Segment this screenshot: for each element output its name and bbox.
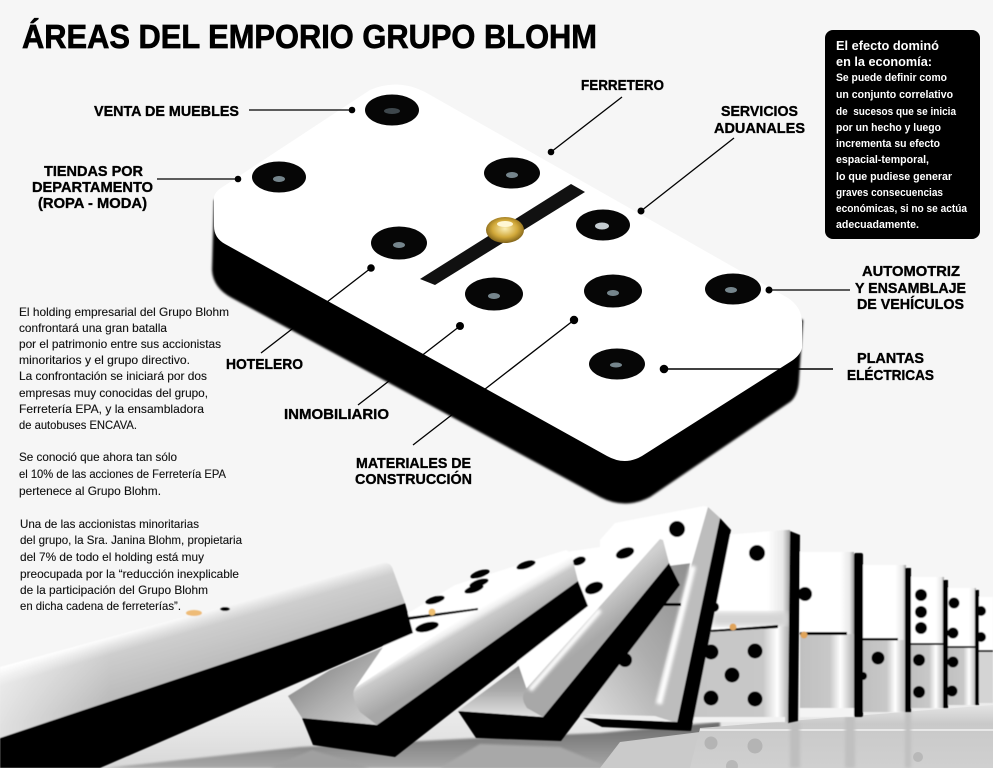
body text: por el patrimonio entre sus accionistas bbox=[19, 337, 221, 351]
body text: Se conoció que ahora tan sólo bbox=[19, 450, 177, 464]
label: automotriz: AUTOMOTRIZ bbox=[862, 263, 960, 280]
domino 6 bbox=[798, 552, 863, 717]
label: plantas electricas: ELÉCTRICAS bbox=[847, 367, 934, 384]
right white margin bbox=[993, 0, 998, 768]
domino white face bbox=[214, 84, 802, 461]
label: tiendas por departamento bbox=[32, 163, 241, 212]
label: plantas electricas bbox=[660, 350, 934, 384]
label: servicios aduanales bbox=[638, 103, 805, 214]
body text: confrontará una gran batalla bbox=[19, 321, 167, 335]
label: hotelero: HOTELERO bbox=[226, 356, 303, 373]
label: automotriz: DE VEHÍCULOS bbox=[857, 296, 964, 313]
body text: minoritarios y el grupo directivo. bbox=[19, 353, 190, 367]
callout text: económicas, si no se actúa bbox=[836, 203, 968, 215]
body text: del grupo, la Sra. Janina Blohm, propietaria bbox=[20, 533, 242, 547]
label: materiales de construccion: CONSTRUCCIÓN bbox=[355, 470, 472, 488]
body text: el 10% de las acciones de Ferretería EPA bbox=[19, 467, 226, 481]
callout: el efecto domino bbox=[825, 30, 980, 239]
domino 5 bbox=[693, 530, 800, 723]
label: ferretero: FERRETERO bbox=[581, 77, 664, 94]
domino 10 bbox=[975, 590, 993, 705]
title: ÁREAS DEL EMPORIO GRUPO BLOHM bbox=[22, 18, 597, 55]
label: venta de muebles bbox=[94, 103, 355, 120]
body text: en dicha cadena de ferreterías”. bbox=[20, 599, 181, 613]
body text: pertenece al Grupo Blohm. bbox=[19, 484, 161, 498]
label: tiendas por departamento: TIENDAS POR bbox=[44, 163, 143, 180]
label: automotriz: Y ENSAMBLAJE bbox=[855, 280, 966, 297]
body text: empresas muy conocidas del grupo, bbox=[19, 386, 208, 400]
body text: Ferretería EPA, y la ensambladora bbox=[19, 402, 204, 416]
callout text: incrementa su efecto bbox=[836, 138, 940, 150]
callout text: adecuadamente. bbox=[836, 219, 919, 231]
label: inmobiliario: INMOBILIARIO bbox=[284, 406, 389, 423]
label: automotriz bbox=[766, 263, 966, 313]
floor with reflections bbox=[0, 670, 998, 768]
body text bbox=[19, 305, 242, 613]
label: tiendas por departamento: DEPARTAMENTO bbox=[32, 179, 153, 196]
centre bar bbox=[420, 184, 585, 285]
label: inmobiliario bbox=[284, 322, 464, 423]
domino 1 bbox=[0, 563, 413, 768]
domino 9 bbox=[946, 588, 979, 705]
gold stud bbox=[486, 217, 524, 243]
label: plantas electricas: PLANTAS bbox=[857, 350, 924, 367]
domino black base bbox=[212, 150, 803, 504]
body text: El holding empresarial del Grupo Blohm bbox=[19, 305, 229, 319]
label: servicios aduanales: ADUANALES bbox=[714, 120, 805, 137]
callout text: Se puede definir como bbox=[836, 72, 947, 84]
callout heading: El efecto dominó bbox=[836, 38, 939, 53]
domino 8 bbox=[911, 577, 948, 708]
label: materiales de construccion: MATERIALES DE bbox=[356, 455, 471, 472]
callout heading bbox=[836, 38, 939, 69]
domino 2 bbox=[288, 550, 588, 757]
domino 4 bbox=[580, 506, 731, 731]
domino 3 bbox=[458, 538, 680, 741]
callout text bbox=[836, 72, 968, 231]
pips bbox=[252, 94, 761, 380]
central domino tile bbox=[212, 84, 803, 503]
body text: La confrontación se iniciará por dos bbox=[19, 369, 207, 383]
label: servicios aduanales: SERVICIOS bbox=[721, 103, 798, 120]
body text: del 7% de todo el holding está muy bbox=[20, 550, 204, 564]
label: materiales de construccion bbox=[355, 316, 578, 488]
label: hotelero bbox=[226, 264, 375, 373]
body text: de la participación del Grupo Blohm bbox=[20, 583, 208, 597]
callout text: por un hecho y luego bbox=[836, 122, 941, 134]
body text: preocupada por la “reducción inexplicable bbox=[20, 567, 239, 581]
falling domino row bbox=[0, 506, 993, 768]
callout heading: en la economía: bbox=[836, 54, 932, 69]
callout text: un conjunto correlativo bbox=[836, 89, 953, 101]
domino 7 bbox=[859, 565, 911, 712]
callout text: de sucesos que se inicia bbox=[836, 106, 957, 118]
label: ferretero bbox=[548, 77, 664, 155]
body text: de autobuses ENCAVA. bbox=[19, 418, 137, 432]
label: tiendas por departamento: (ROPA - MODA) bbox=[38, 195, 147, 212]
callout text: lo que pudiese generar bbox=[836, 171, 953, 183]
callout text: espacial-temporal, bbox=[836, 154, 929, 166]
body text: Una de las accionistas minoritarias bbox=[20, 517, 199, 531]
callout text: graves consecuencias bbox=[836, 187, 943, 199]
label: venta de muebles: VENTA DE MUEBLES bbox=[94, 103, 239, 120]
